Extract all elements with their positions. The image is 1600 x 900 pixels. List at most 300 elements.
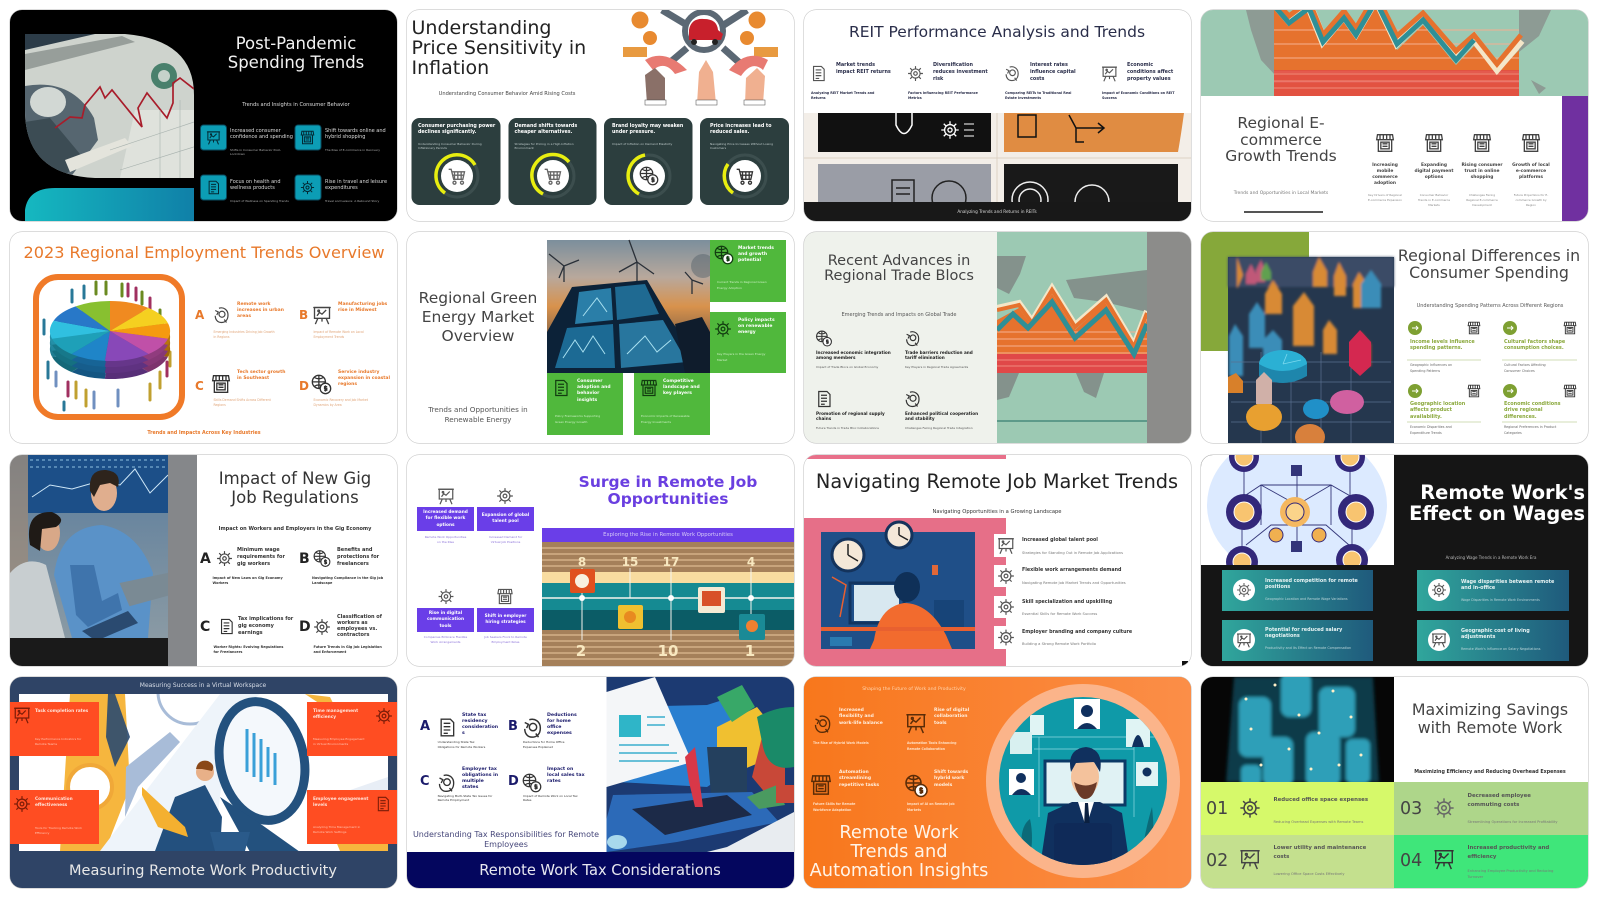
item heading: states [462, 785, 478, 790]
card note: Analyzing Time Management in [313, 825, 360, 829]
icon: shop [1564, 322, 1576, 334]
title: with Remote Work [1418, 718, 1562, 737]
timeline number: 1 [745, 642, 755, 660]
card heading: Wage disparities between remote [1461, 578, 1554, 584]
tile heading [1468, 844, 1549, 862]
item heading: drive regional [1504, 407, 1543, 413]
card note [717, 352, 765, 363]
card heading: levels [313, 803, 327, 808]
card note: Understanding Consumer Behavior During [418, 142, 482, 146]
title: REIT Performance Analysis and Trends [849, 23, 1145, 41]
tile note: Reducing Overhead Expenses with Remote Teams [1274, 820, 1363, 824]
purple box: flexible work [417, 507, 474, 531]
item heading [230, 179, 281, 191]
subtitle: Impact on Workers and Employers in the Gig Economy [219, 526, 371, 532]
item heading: contractors [337, 632, 369, 638]
item heading: platforms [1519, 175, 1543, 180]
box note: Work Arrangements [431, 640, 460, 644]
icon: automation [812, 776, 830, 794]
item note: Landscape [312, 580, 332, 584]
green card: policy impacts [710, 312, 786, 373]
arrow badge: geographic [1408, 384, 1422, 398]
peach ring [986, 684, 1180, 878]
card note: Key Players in the Green Energy [717, 352, 765, 356]
letter B: B [299, 551, 310, 567]
item heading: Remote work [237, 302, 271, 307]
title [1225, 114, 1337, 165]
item note: Metrics [908, 96, 922, 100]
card note: Energy Adoption [717, 286, 742, 290]
letter C: C [420, 774, 430, 789]
item heading: property values [1127, 76, 1171, 82]
red card: communication [10, 790, 99, 844]
image: world map with zigzag chart [997, 232, 1147, 443]
item note: Understanding State Tax [438, 740, 474, 744]
card note: Policy Frameworks Supporting [555, 414, 600, 418]
title: Maximizing Savings [1412, 700, 1568, 719]
tile heading: Increased productivity and [1468, 844, 1549, 850]
illustration: icon tiles and footer band [804, 66, 1191, 221]
item note [813, 802, 855, 813]
item note: Dynamics by Area [314, 403, 342, 407]
card note: Tools for Tracking Remote Work [35, 826, 82, 830]
title: Price Sensitivity in [412, 37, 586, 59]
box note: Remote Work Opportunities [425, 534, 466, 538]
item heading: employees vs. [337, 626, 377, 632]
item note [907, 741, 957, 752]
item heading [237, 302, 284, 319]
card heading: Employee engagement [313, 797, 368, 802]
panel: Regional E-commerce Growth [1201, 10, 1588, 221]
item heading: increases in urban [237, 308, 284, 313]
title [579, 474, 757, 508]
item heading: Enhanced political cooperation [905, 411, 978, 416]
panel: demand shifts gauge [508, 118, 596, 205]
icon tile: storefront [295, 125, 321, 150]
image: wind turbines and monitors [547, 240, 715, 373]
item note [1005, 91, 1072, 100]
illustration: green block, chart pegs photo and icons [1201, 232, 1588, 443]
card note: Environment [514, 146, 534, 150]
title: Post-Pandemic [236, 34, 356, 53]
image: magnifier, clocks and person [19, 694, 388, 851]
item heading: Tax implications for [238, 616, 293, 622]
item note: Travel and Leisure: A Rebound Story [325, 199, 379, 203]
item heading [1461, 162, 1503, 180]
icon: economic integration [817, 331, 831, 346]
panel: purchasing power gauge [412, 118, 500, 205]
item note: Key Drivers of Regional [1368, 193, 1402, 197]
tile heading: Decreased employee [1468, 792, 1531, 798]
item heading: influence capital [1030, 69, 1076, 75]
item note [1504, 424, 1556, 436]
navy footer band [407, 852, 794, 888]
item note: for Freelancers [214, 650, 242, 654]
item heading: costs [1030, 76, 1044, 82]
item heading: risk [933, 76, 943, 82]
icon: chess [715, 321, 731, 337]
letter D: D [299, 619, 311, 635]
box heading: hiring strategies [485, 620, 526, 625]
card heading: efficiency [313, 715, 336, 720]
item heading: Diversification [933, 62, 973, 68]
card heading: Time management [313, 709, 358, 714]
item heading: chains [816, 416, 831, 421]
item note: Factors Influencing REIT Performance [908, 91, 978, 95]
item note [1102, 91, 1174, 100]
footer subtitle: Trends and Impacts Across Key Industries [147, 431, 261, 436]
item heading: s [462, 731, 465, 736]
icon: consumer trust [1474, 135, 1490, 151]
title: Overview [442, 327, 514, 345]
subtitle: Trends and Opportunities in Local Markets [1234, 191, 1328, 196]
title: commerce [1240, 130, 1322, 148]
icon: network [556, 380, 567, 396]
icon tab: easel [994, 534, 1019, 557]
item note [523, 740, 565, 749]
item note: Automation Tools Enhancing [907, 741, 957, 745]
item heading: rates [547, 779, 561, 784]
card note [35, 737, 81, 747]
item heading: Rise in travel and leisure [325, 179, 387, 185]
number 02: 02 [1206, 851, 1228, 871]
icon: political cooperation [906, 392, 919, 406]
item heading: impact REIT returns [836, 69, 891, 75]
timeline number: 4 [747, 555, 755, 569]
subtitle: Emerging Trends and Impacts on Global Trade [842, 312, 956, 318]
arrow badge: cultural [1503, 321, 1517, 335]
icon: trade barriers [907, 332, 919, 346]
item note: Cultural Factors Affecting [1504, 363, 1546, 367]
title: Measuring Remote Work Productivity [69, 863, 337, 879]
letter A: A [200, 551, 211, 567]
item note: Regional Preferences in Product [1504, 425, 1556, 429]
item heading: Impact on [547, 767, 573, 772]
box heading [427, 611, 464, 630]
title: Energy Market [422, 308, 534, 326]
item note: Expenditure Trends [1410, 431, 1442, 435]
item heading [816, 350, 891, 360]
item heading [1414, 162, 1454, 180]
icon: flexibility [816, 716, 830, 732]
tile heading: Reduced office space expenses [1274, 796, 1368, 802]
letter C: C [200, 619, 210, 635]
icon: hybrid [906, 776, 927, 796]
title: Understanding [412, 17, 552, 39]
icon tile: travel [295, 175, 321, 200]
card heading [313, 709, 358, 720]
item note [438, 794, 492, 802]
card note: Navigating Price Increases Without Losing [710, 142, 773, 146]
card note: Measuring Employee Engagement [313, 737, 365, 741]
illustration: analyst with magnifier and red cards [10, 694, 397, 851]
panel: Regional Consumer Spending [1201, 232, 1588, 443]
illustration: banknote with red chart and icon tiles [25, 34, 322, 221]
icon: collaboration [906, 715, 926, 733]
box note [425, 534, 466, 545]
card note: Current Trends in Regional Green [717, 280, 767, 284]
timeline number: 2 [576, 642, 586, 660]
red card: employee engagement [307, 790, 397, 844]
item note: Navigating Compliance in the Gig Job [312, 576, 383, 580]
card: reduced salary [1222, 620, 1373, 661]
item note: Rates [523, 798, 531, 802]
green accent block [1201, 232, 1309, 351]
item note: Emerging Industries Driving Job Growth [214, 330, 275, 334]
underline accent [1244, 211, 1323, 213]
item note: Obligations for Remote Workers [438, 745, 485, 749]
tile 03 [1394, 782, 1588, 835]
icon tab: clock gears [994, 565, 1019, 587]
item heading [1504, 339, 1565, 352]
green card: market trends [710, 240, 786, 302]
box note [424, 635, 467, 645]
item heading: tools [934, 721, 947, 726]
icon: tech sector [213, 376, 229, 392]
title [810, 823, 988, 880]
card heading: key players [663, 391, 692, 396]
item note: Comparing REITs to Traditional Real [1005, 91, 1071, 95]
item note: Regional E-commerce [1466, 198, 1498, 202]
green card: consumer adoption [547, 373, 623, 435]
number 01: 01 [1206, 799, 1228, 819]
letter D: D [299, 379, 309, 393]
icon: scroll seal [441, 719, 454, 736]
item note: Future Trends in Trade Bloc Collaborations [816, 426, 879, 430]
card heading: insights [577, 398, 597, 403]
card heading [612, 123, 683, 135]
item heading: repetitive tasks [839, 783, 879, 788]
illustration: two men with tablet, grey band and icons [10, 455, 397, 666]
card heading: behavior [577, 391, 599, 396]
card heading: Policy impacts [738, 318, 775, 323]
item heading: gig workers [237, 561, 270, 567]
item heading: Skill specialization and upskilling [1022, 600, 1112, 605]
item note [214, 330, 275, 339]
tile 04 [1394, 835, 1588, 888]
item heading: Growth of local [1512, 163, 1550, 168]
card note: Impact of Inflation on Demand Elasticity [612, 142, 672, 146]
subtitle [428, 405, 528, 424]
item heading: Increased economic integration [816, 350, 891, 355]
card heading: Task completion rates [35, 709, 88, 714]
item note: in Regions [214, 335, 230, 339]
item heading: and stability [905, 416, 935, 421]
item note: Regions [214, 403, 226, 407]
title: Growth Trends [1225, 147, 1337, 165]
item heading [1504, 401, 1561, 420]
title: Job Regulations [231, 488, 359, 507]
card note: Economic Impacts of Renewable [641, 414, 690, 418]
panel: Understanding Price Sensitivity [407, 10, 794, 221]
panel: Maximizing Savings [1201, 677, 1588, 888]
item heading: commerce [1372, 175, 1398, 180]
item note [1514, 193, 1548, 207]
card heading [663, 379, 700, 398]
item heading [839, 770, 879, 789]
card heading: reduced sales. [710, 130, 749, 135]
item heading: regions [338, 382, 357, 387]
item heading: requirements for [237, 554, 285, 560]
card heading: Demand shifts towards [514, 124, 577, 129]
item heading: Geographic location [1410, 401, 1465, 407]
purple box: employer hiring [477, 608, 534, 632]
arrow badge: income [1408, 321, 1422, 335]
item note [907, 802, 955, 813]
card note [710, 142, 773, 150]
item note: Impact of Remote Work on Local [314, 330, 364, 334]
item heading [237, 370, 286, 381]
item note: commerce Growth by [1515, 198, 1547, 202]
item heading [905, 411, 978, 421]
subtitle: Understanding Consumer Behavior Amid Rising Costs [439, 91, 575, 97]
box heading: talent pool [492, 519, 519, 524]
box note [484, 635, 527, 645]
item note: Challenges Facing [1469, 193, 1495, 197]
card heading: under pressure. [612, 130, 655, 135]
item note: Expenses Explained [523, 745, 553, 749]
panel: 2023 Regional Employment [10, 232, 397, 443]
subtitle: Maximizing Efficiency and Reducing Overhead Expenses [1414, 770, 1566, 775]
card heading: and in-office [1461, 585, 1495, 591]
item note [1410, 362, 1452, 374]
icon: idea gear [1240, 798, 1260, 818]
icon: shop [1564, 385, 1576, 397]
item heading: models [934, 783, 952, 788]
image: worker at desk with clocks [821, 522, 975, 649]
tile note [1468, 868, 1553, 881]
item note: Employment Trends [314, 335, 344, 339]
icon: hand coins [525, 719, 540, 737]
item note: Future Trends in Gig Job Legislation [314, 645, 382, 649]
card heading: Consumer [577, 379, 602, 384]
icon tab: skills [994, 596, 1019, 618]
item heading: rise in Midwest [338, 308, 377, 313]
icon: local platforms [1523, 135, 1539, 151]
box heading: for flexible work [426, 516, 465, 521]
item heading [933, 62, 988, 82]
item heading: freelancers [337, 561, 369, 567]
item note: Strategies for Standing Out in Remote Job Applications [1022, 550, 1123, 554]
timeline number: 8 [578, 555, 586, 569]
item note: Impact of Wellness on Spending Trends [230, 199, 289, 203]
timeline number: 10 [658, 642, 678, 660]
item heading [836, 62, 891, 75]
item note: Spending Patterns [1410, 369, 1440, 373]
item heading: collaboration [934, 714, 967, 719]
card heading: Increased competition for remote [1265, 578, 1358, 584]
panel: REIT Performance Analysis [804, 10, 1191, 221]
image: glowing glass jars [1201, 672, 1394, 787]
item heading [816, 411, 885, 421]
box heading [423, 510, 468, 529]
subtitle: Understanding Tax Responsibilities for Remote [413, 830, 599, 839]
item heading: Employer tax [462, 767, 497, 772]
item heading: Shift towards online and [325, 128, 386, 134]
box heading: Increased demand [423, 510, 468, 515]
card: increased competition [1222, 570, 1373, 611]
item heading: work-life balance [839, 721, 883, 726]
panel: Regional Trade Blocs [804, 232, 1191, 443]
item heading: Flexible work arrangements demand [1022, 568, 1121, 573]
item heading: gig economy [238, 623, 274, 629]
item heading: Benefits and [337, 547, 372, 553]
red card: task completion [10, 702, 99, 756]
image: laptop, document, boxes and money [606, 677, 794, 852]
item note: Skills Demand Shifts Across Different [214, 398, 271, 402]
item note: Estate Investments [1005, 96, 1041, 100]
panel: Impact of New Gig Job Regulations [10, 455, 397, 666]
card heading [710, 123, 772, 135]
letter A: A [195, 308, 204, 322]
item heading [337, 614, 382, 638]
item note: Building a Strong Remote Work Portfolio [1022, 642, 1096, 646]
item heading: for home [547, 719, 571, 724]
card heading: energy [738, 330, 756, 335]
illustration: control room photo and green cards [407, 232, 794, 443]
card heading: Consumer purchasing power [418, 124, 495, 129]
title: Remote Work [839, 822, 959, 843]
card note: Inflationary Periods [418, 146, 447, 150]
item note: Impact of Remote Work on Local Tax [523, 794, 578, 798]
item heading [230, 128, 293, 140]
card heading: Brand loyalty may weaken [612, 124, 683, 129]
card: wage disparities [1417, 570, 1569, 611]
item heading: consideration [462, 725, 498, 730]
icon: remote work [215, 308, 228, 322]
image: mint map with zigzag chart [1201, 10, 1588, 96]
item heading: Increased consumer [230, 128, 281, 134]
item note: Key Players in Regional Trade Agreements [905, 365, 968, 369]
tile note: Streamlining Operations for Increased Profitability [1468, 820, 1557, 824]
card heading: potential [738, 258, 761, 263]
icon: diversification [908, 66, 923, 81]
item note [212, 576, 283, 586]
icon: funnel [440, 775, 454, 791]
item heading: protections for [337, 554, 379, 560]
icon: benefits [314, 551, 330, 566]
item note [1410, 424, 1452, 436]
item heading: local sales tax [547, 773, 585, 778]
title [419, 289, 537, 346]
item heading: hybrid shopping [325, 134, 365, 140]
subtitle: Shaping the Future of Work and Productivity [862, 687, 966, 692]
item note: Navigating Multi-State Tax Issues for [438, 794, 492, 798]
card note [514, 142, 574, 150]
panel: Remote Work Tax Considerations [407, 677, 794, 888]
letter B: B [508, 719, 518, 734]
letter B: B [299, 308, 308, 322]
title: Impact of New Gig [219, 469, 371, 488]
card heading: and growth [738, 252, 767, 257]
people around the pie [44, 282, 170, 410]
card heading [577, 379, 611, 404]
box heading: tools [440, 624, 452, 629]
icon: gear circle [439, 589, 453, 604]
box heading: Shift in employer [485, 614, 526, 619]
illustration: glowing jars and four colored tiles [1201, 677, 1588, 888]
item heading [839, 708, 883, 727]
subtitle: Renewable Energy [445, 414, 511, 424]
item heading [238, 616, 293, 636]
illustration: pie chart with people and icons [33, 274, 332, 420]
item note: Categories [1504, 431, 1522, 435]
icon tile: building [200, 175, 226, 200]
card note: Efficiency [35, 831, 49, 835]
card heading [313, 797, 368, 808]
item note: Success [1102, 96, 1117, 100]
illustration: pink panel and desk worker scene [804, 455, 1191, 666]
